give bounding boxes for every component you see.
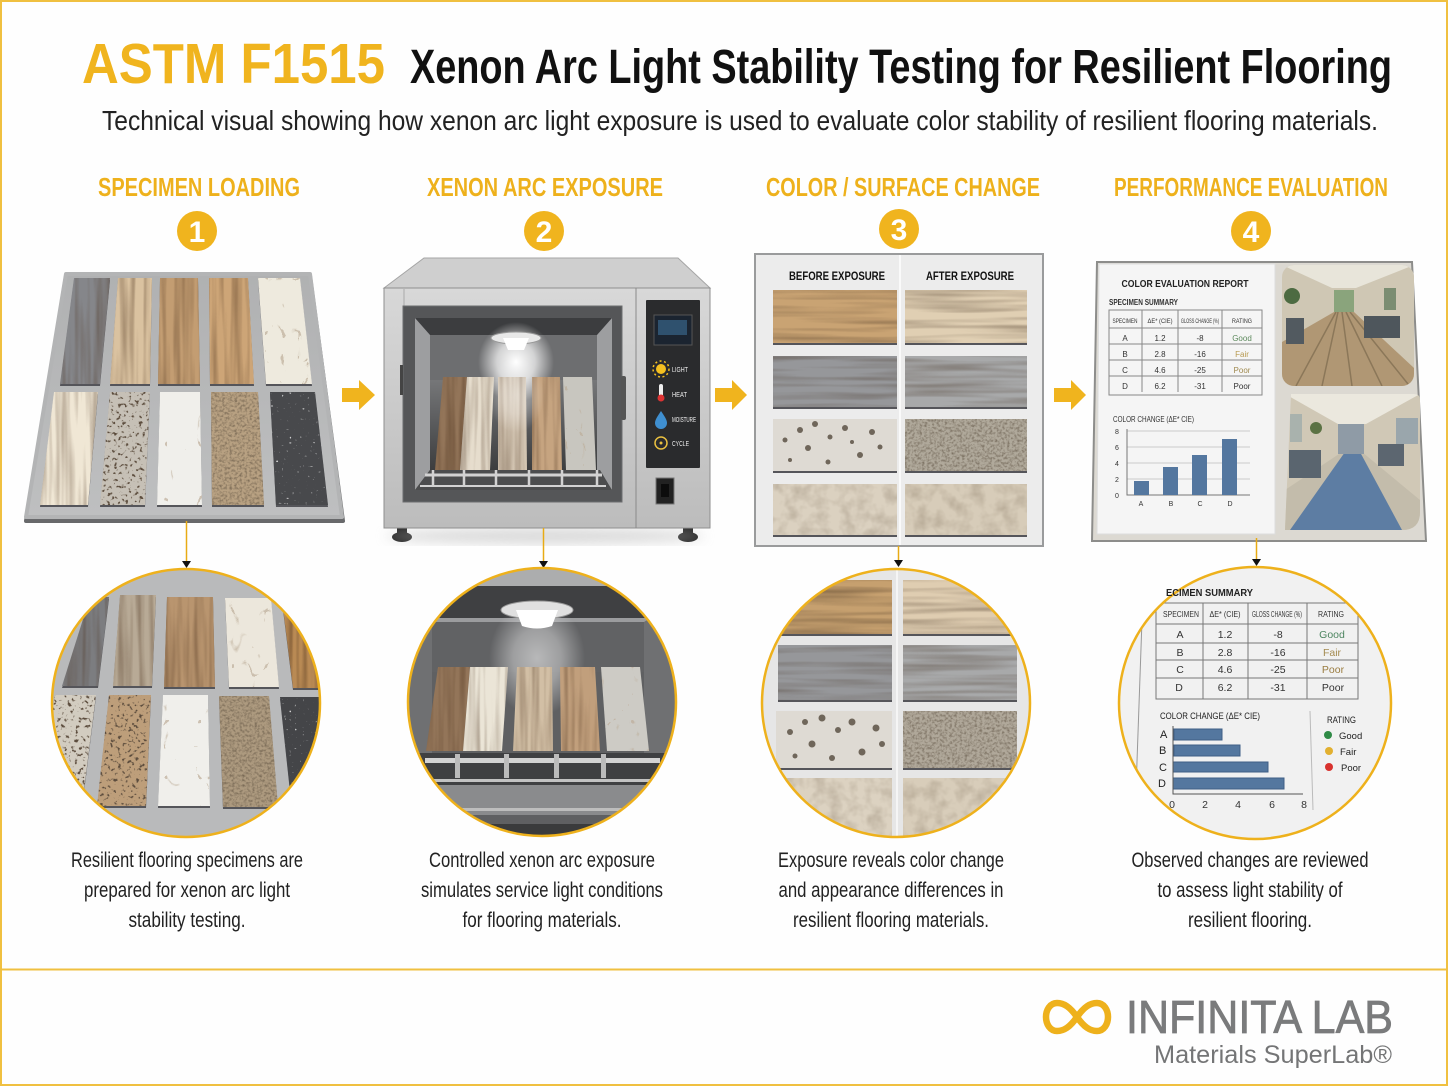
swatches before [773, 290, 897, 535]
detail table [1156, 603, 1358, 699]
description 1 [71, 849, 303, 932]
detail table: RATING [1318, 610, 1344, 619]
specimens detail [426, 667, 649, 751]
rating legend [1324, 715, 1362, 774]
bar chart: color change: C [1197, 501, 1203, 508]
specimen table: RATING [1232, 318, 1252, 325]
detail bar chart [1158, 711, 1307, 811]
detail table: -16 [1270, 647, 1286, 659]
icon: cycle [655, 437, 667, 449]
specimen table: B [1122, 350, 1128, 359]
rating legend: Fair [1340, 747, 1356, 758]
description 2: simulates service light conditions [421, 879, 663, 902]
label: moisture: MOISTURE [672, 415, 696, 424]
detail table: Good [1319, 629, 1345, 641]
connector: report to detail [1252, 538, 1261, 566]
step number 2 [524, 211, 564, 251]
description 1: Resilient flooring specimens are [71, 849, 303, 872]
rating legend: RATING [1327, 715, 1356, 726]
detail table: D [1175, 682, 1183, 694]
detail table: -31 [1270, 682, 1286, 694]
chamber door and interior [403, 306, 622, 502]
specimen table: D [1122, 382, 1128, 391]
photo: blue floor corridor [1285, 394, 1420, 530]
connector: chamber to detail [539, 528, 548, 568]
label: light: LIGHT [672, 365, 688, 374]
label: before exposure: BEFORE EXPOSURE [789, 269, 885, 283]
specimen table [1109, 310, 1262, 395]
specimens row one [60, 278, 312, 384]
specimen table: Good [1232, 334, 1252, 343]
description 4: to assess light stability of [1158, 879, 1343, 902]
step number 1: 1 [189, 216, 205, 249]
panel: xenon arc chamber [384, 258, 710, 544]
specimens in chamber [435, 377, 596, 470]
detail table: 1.2 [1218, 629, 1232, 641]
description 2: Controlled xenon arc exposure [429, 849, 655, 872]
panel: before and after exposure board [755, 254, 1043, 546]
description 3: resilient flooring materials. [793, 909, 989, 932]
wordmark: INFINITA LAB [1126, 991, 1393, 1043]
detail bar chart: COLOR CHANGE (ΔE* CIE) [1160, 711, 1260, 721]
specimen table: -16 [1194, 350, 1206, 359]
detail bar chart: A [1160, 729, 1168, 741]
chamber feet [392, 528, 698, 542]
step number 4: 4 [1243, 216, 1260, 249]
specimens row two [40, 392, 328, 505]
description 1: prepared for xenon arc light [84, 879, 290, 902]
heading: color / surface change: COLOR / SURFACE CHANGE [766, 172, 1040, 202]
bar chart: color change: 6 [1115, 445, 1119, 452]
detail bar chart: 2 [1202, 799, 1208, 811]
connector: board to detail [894, 546, 903, 567]
detail table: 6.2 [1218, 682, 1232, 694]
heading: specimen loading: SPECIMEN LOADING [98, 172, 300, 202]
specimen table: Poor [1234, 366, 1251, 375]
bar chart: color change: 8 [1115, 429, 1119, 436]
step number 2: 2 [536, 216, 552, 249]
description 3: and appearance differences in [778, 879, 1004, 902]
step number 4 [1231, 211, 1271, 251]
evaluation report sheet [1097, 264, 1275, 534]
detail bar chart: 0 [1169, 799, 1175, 811]
detail bar chart: C [1159, 762, 1167, 774]
specimen rack [420, 470, 606, 486]
description 3: Exposure reveals color change [778, 849, 1004, 872]
label: cycle: CYCLE [672, 439, 689, 448]
specimen table: SPECIMEN [1112, 318, 1138, 325]
photo: wood floor corridor [1282, 265, 1414, 386]
report subtitle: SPECIMEN SUMMARY [1109, 298, 1179, 307]
control panel [646, 300, 700, 468]
logo: Infinita Lab [1046, 991, 1393, 1069]
specimen table: Poor [1234, 382, 1251, 391]
xenon lamp [491, 332, 541, 350]
specimen table: -31 [1194, 382, 1206, 391]
detail table: B [1176, 647, 1184, 659]
detail bar chart: 4 [1235, 799, 1241, 811]
arrow: step 1 to 2 [342, 380, 375, 410]
detail table: GLOSS CHANGE (%) [1252, 610, 1302, 619]
detail table: -8 [1273, 629, 1283, 641]
specimen table: Fair [1235, 350, 1249, 359]
bar chart: color change: D [1227, 501, 1233, 508]
rating legend: Good [1339, 731, 1362, 742]
detail table: Fair [1323, 647, 1342, 659]
detail bar chart: D [1158, 778, 1166, 790]
specimen table: ΔE* (CIE) [1148, 318, 1172, 325]
arrow: step 2 to 3 [715, 380, 747, 410]
description 4: Observed changes are reviewed [1132, 849, 1368, 872]
specimen table: GLOSS CHANGE (%) [1181, 318, 1219, 325]
tagline: Materials SuperLab® [1154, 1041, 1393, 1069]
title [82, 32, 1392, 96]
report title: COLOR EVALUATION REPORT [1122, 278, 1249, 290]
bar chart: color change: COLOR CHANGE (ΔE* CIE) [1113, 415, 1194, 424]
lamp detail [501, 601, 573, 628]
detail table: 4.6 [1218, 664, 1232, 676]
detail table: C [1176, 664, 1184, 676]
description 2 [421, 849, 663, 932]
connector: tray to detail [182, 521, 191, 568]
rating legend: Poor [1341, 763, 1361, 774]
panel: evaluation board [1092, 262, 1426, 541]
terrazzo chips before [782, 421, 882, 464]
title: ASTM F1515 [82, 32, 385, 96]
description 1: stability testing. [128, 909, 246, 932]
detail circle 2: chamber interior [405, 566, 679, 840]
description 4: resilient flooring. [1188, 909, 1312, 932]
specimen table: -25 [1194, 366, 1206, 375]
bar chart: color change: A [1139, 501, 1144, 508]
label: heat: HEAT [672, 390, 687, 399]
specimen table: 1.2 [1154, 334, 1166, 343]
specimen table: 6.2 [1154, 382, 1166, 391]
detail circle 3: swatches [758, 566, 1034, 842]
terrazzo chips detail [787, 714, 885, 761]
step number 3: 3 [891, 214, 907, 247]
icon: light [653, 361, 669, 377]
bar chart: color change [1113, 415, 1250, 508]
bar chart: color change: 0 [1115, 493, 1119, 500]
detail circle 4: report summary [1118, 566, 1392, 840]
bar chart: color change: 4 [1115, 461, 1119, 468]
swatches after [905, 290, 1027, 535]
detail table: SPECIMEN [1163, 610, 1199, 619]
detail table: ΔE* (CIE) [1210, 610, 1241, 619]
description 3 [778, 849, 1004, 932]
step number 3 [879, 209, 919, 249]
icon: infinity [1046, 1003, 1108, 1031]
specimen table: 4.6 [1154, 366, 1166, 375]
table heading: ECIMEN SUMMARY [1166, 588, 1253, 599]
label: after exposure: AFTER EXPOSURE [926, 269, 1014, 283]
detail circle 1: specimens [40, 568, 330, 838]
detail table: A [1176, 629, 1184, 641]
arrow: step 3 to 4 [1054, 380, 1086, 410]
specimen table: -8 [1196, 334, 1204, 343]
icon: heat [658, 384, 664, 402]
specimen table: C [1122, 366, 1128, 375]
detail table: Poor [1322, 682, 1345, 694]
power switch [656, 478, 674, 504]
specimen table: 2.8 [1154, 350, 1166, 359]
heading: xenon arc exposure: XENON ARC EXPOSURE [427, 172, 663, 202]
detail bar chart: B [1159, 745, 1166, 757]
description 4 [1132, 849, 1368, 932]
description 2: for flooring materials. [462, 909, 622, 932]
detail bar chart: 6 [1269, 799, 1275, 811]
step number 1 [177, 211, 217, 251]
specimen table: A [1122, 334, 1128, 343]
detail table: -25 [1270, 664, 1286, 676]
bar chart: color change: B [1169, 501, 1174, 508]
detail table: 2.8 [1218, 647, 1232, 659]
bar chart: color change: 2 [1115, 477, 1119, 484]
icon: moisture [655, 411, 667, 429]
detail bar chart: 8 [1301, 799, 1307, 811]
detail table: Poor [1322, 664, 1345, 676]
panel: specimen tray [26, 274, 343, 521]
